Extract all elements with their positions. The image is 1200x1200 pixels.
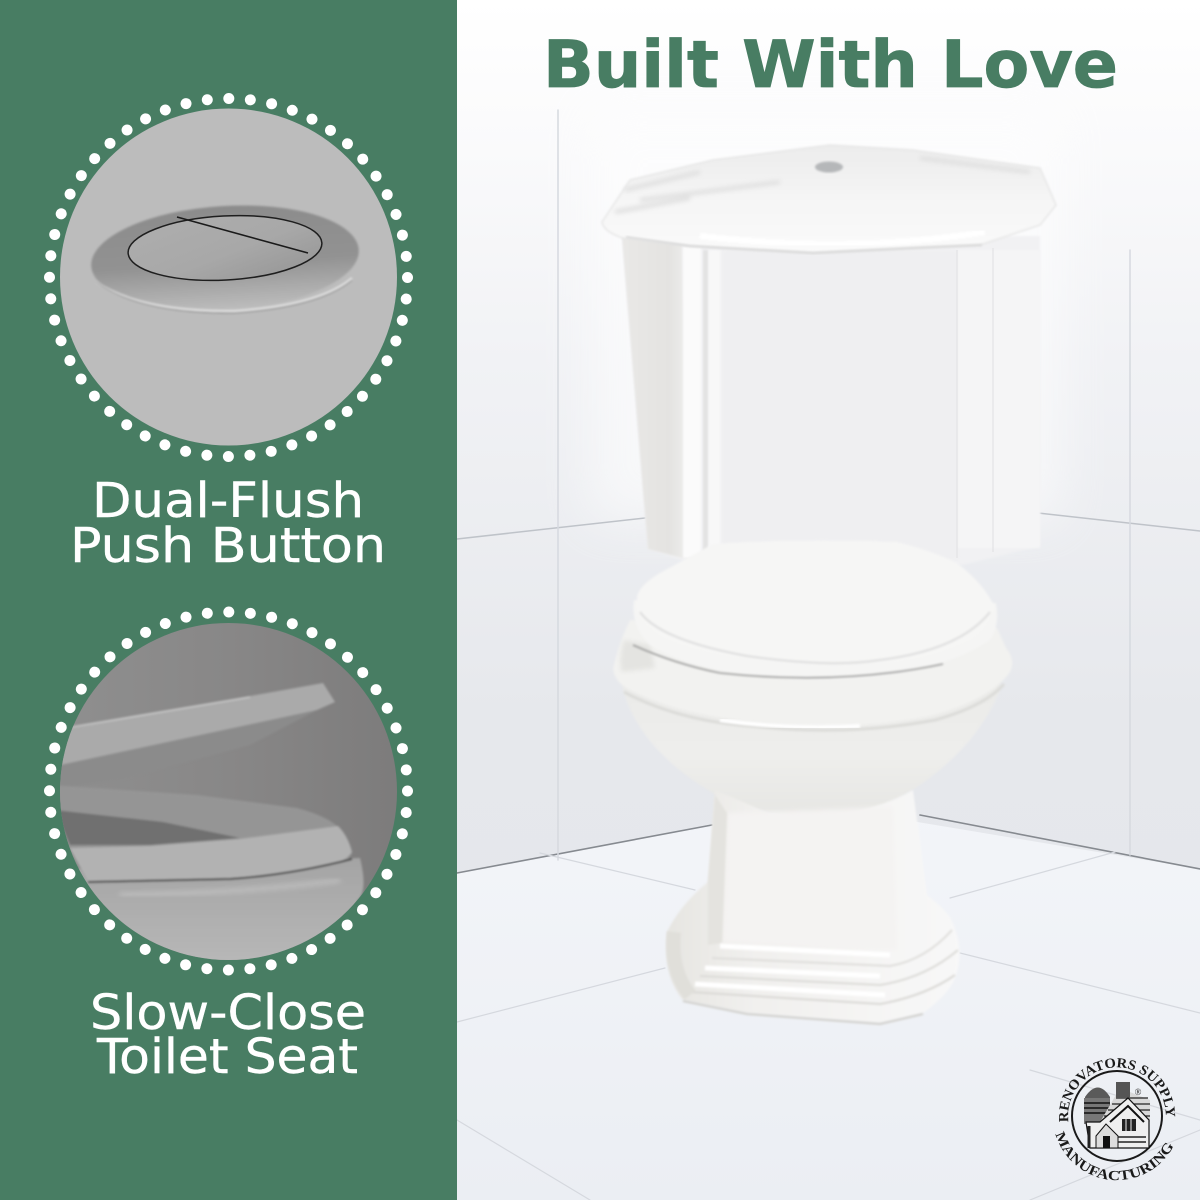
seat ring bbox=[633, 600, 997, 680]
tank lid chrome cap bbox=[815, 162, 843, 172]
circular photo: push button bbox=[55, 105, 405, 450]
left green panel bbox=[0, 0, 457, 1200]
label: Slow-Close Toilet Seat bbox=[90, 985, 366, 1085]
toilet tank lid bbox=[602, 145, 1056, 253]
logo: Renovators Supply Manufacturing bbox=[1055, 1058, 1176, 1180]
feature: dual-flush push button bbox=[50, 98, 408, 456]
label: Dual-Flush Push Button: Push Button bbox=[70, 518, 386, 574]
circular photo: toilet seat bbox=[50, 620, 405, 965]
label: Slow-Close Toilet Seat: Slow-Close bbox=[90, 985, 366, 1041]
dotted ring bbox=[50, 98, 408, 456]
dual buttons bbox=[127, 214, 323, 282]
logo ring text bottom: MANUFACTURING bbox=[1055, 1130, 1173, 1180]
background photo: tiled bathroom corner bbox=[457, 0, 1200, 1200]
label: Slow-Close Toilet Seat: Toilet Seat bbox=[96, 1029, 358, 1085]
toilet bowl rim bbox=[613, 620, 1012, 730]
toilet pedestal and stepped base bbox=[666, 790, 959, 1024]
label: Dual-Flush Push Button: Dual-Flush bbox=[92, 473, 364, 529]
logo ring text top: RENOVATORS SUPPLY bbox=[1059, 1058, 1176, 1122]
seat lid bbox=[637, 540, 994, 665]
toilet tank body bbox=[622, 236, 1040, 566]
logo registered mark: ® bbox=[1135, 1087, 1142, 1097]
button flange bbox=[88, 198, 362, 318]
feature: slow-close toilet seat bbox=[50, 612, 408, 970]
dotted ring bbox=[50, 612, 408, 970]
title: Built With Love bbox=[543, 28, 1118, 103]
toilet illustration bbox=[602, 145, 1056, 1024]
toilet bowl bbox=[623, 660, 1000, 818]
label: Dual-Flush Push Button bbox=[70, 473, 386, 574]
